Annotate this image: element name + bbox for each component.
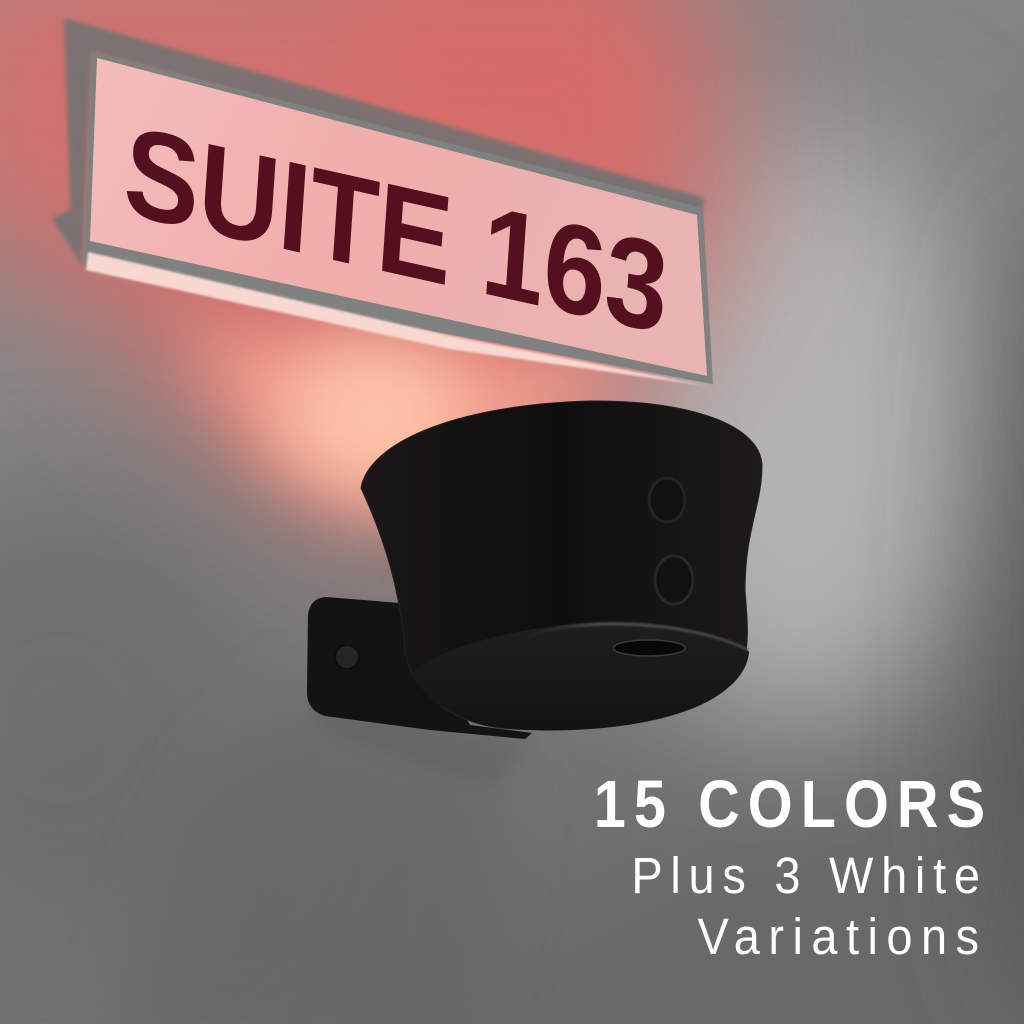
- bright lower rail: [86, 252, 708, 386]
- sign holder and plate: [84, 52, 713, 386]
- button top: [649, 478, 685, 522]
- base highlight arc: [520, 624, 748, 650]
- subline two: Variations: [697, 909, 979, 965]
- lamp base face: [412, 622, 749, 730]
- metal frame: [84, 52, 713, 384]
- charging port: [613, 640, 685, 656]
- headline: 15 COLORS: [594, 767, 985, 842]
- sign text: SUITE 163: [120, 99, 673, 361]
- bracket shadow on wall: [310, 700, 530, 790]
- sign shadow: [52, 18, 705, 266]
- caption: [594, 767, 985, 965]
- sign plate: [90, 58, 707, 376]
- black puck light: [361, 401, 762, 730]
- button bottom: [655, 556, 693, 604]
- wall mount bracket: [307, 597, 532, 739]
- mount screw: [335, 645, 359, 669]
- red light glow on wall: [0, 0, 730, 530]
- subline one: Plus 3 White: [631, 848, 980, 904]
- lamp body: [361, 401, 762, 730]
